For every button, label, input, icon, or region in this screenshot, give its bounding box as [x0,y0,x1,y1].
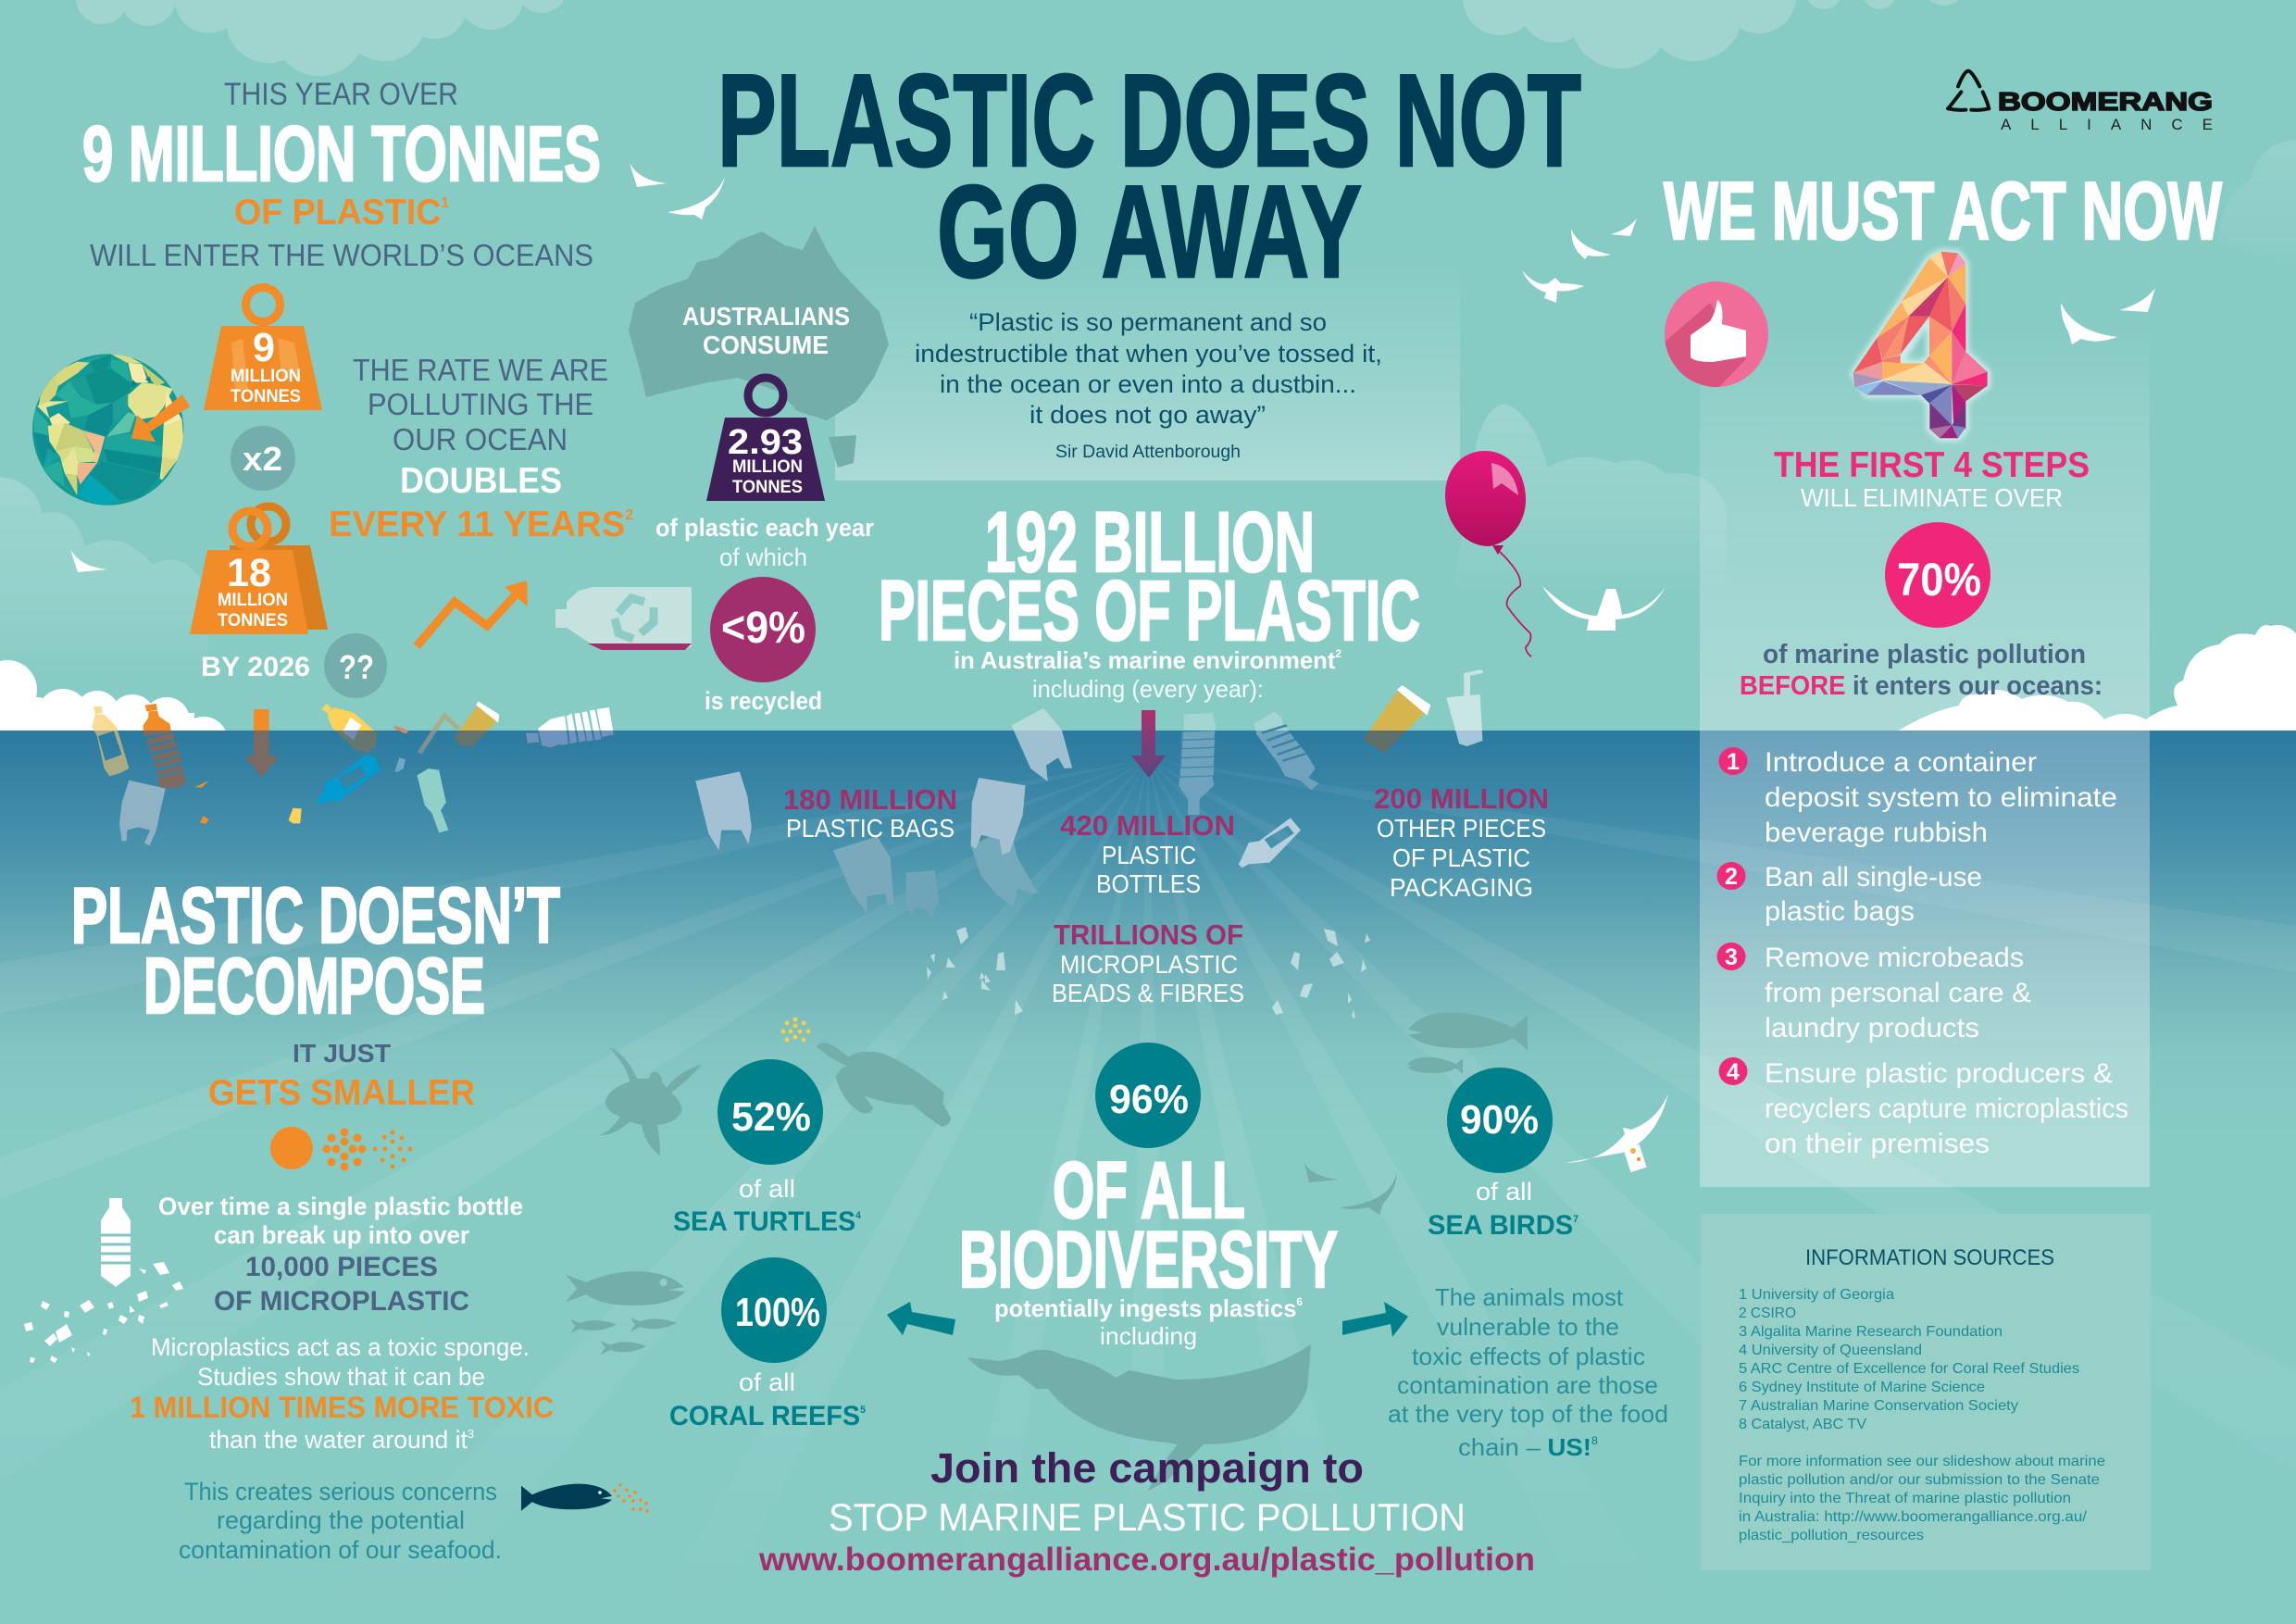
icon: plastic bag [119,781,166,845]
icon: 9 million tonnes weight: 9 [253,325,275,370]
text: it just gets smaller: IT JUST [293,1039,391,1068]
text: 180 million plastic bags [783,783,957,843]
icon: upright ribbed bottle [1179,713,1217,815]
icon: yellow microplastic dots [781,1017,811,1043]
step 4: recyclers capture microplastics [1765,1093,2128,1124]
icon: cigarette [393,725,408,734]
stat: 52 percent of sea turtles: SEA TURTLES [673,1206,865,1237]
text block: Attenborough quote: in the ocean or even into a dustbin... [940,370,1356,398]
stat: 90 percent of sea birds: SEA BIRDS [1428,1210,1578,1241]
text: 180 million plastic bags: 180 MILLION [783,783,957,816]
heading: 192 billion pieces of plastic: 192 BILLION [985,495,1315,590]
heading: information sources: INFORMATION SOURCES [1805,1245,2054,1270]
stat: 90 percent of sea birds: 7 [1573,1214,1578,1225]
silhouette: turtles and fish left [566,1043,951,1355]
stat: 52 percent of sea turtles: 4 [855,1210,862,1221]
icon: thumbs up [1662,281,1768,394]
icon: white bird with plastic [1566,1093,1668,1172]
list: source references: 5 ARC Centre of Excellence for Coral Reef Studies [1739,1361,2079,1377]
panel: four steps lower [1700,731,2150,1187]
heading: 192 billion pieces of plastic: PIECES OF PLASTIC [879,564,1420,658]
icon: pink balloon [1445,451,1531,656]
text block: rate of pollution: 2 [625,507,633,523]
sun rays under water [0,761,2296,979]
text block: top of food chain: The animals most [1435,1283,1624,1311]
stat: 52 percent of sea turtles: of all [739,1175,795,1203]
text: it just gets smaller: GETS SMALLER [208,1073,475,1113]
text: of plastic each year: of which [719,543,807,571]
icon: times two badge: x2 [243,440,282,478]
icon: bag B [971,778,1026,855]
text: 420 million plastic bottles: 420 MILLION [1060,809,1235,842]
stat: 52 percent of sea turtles: 52% [731,1094,811,1140]
stat: 100 percent of coral reefs: CORAL REEFS [669,1401,867,1431]
icon: 18 million tonnes weight: MILLION [218,591,288,610]
stat: less than nine percent recycled: <9% [721,604,805,653]
text: is recycled: is recycled [705,687,822,715]
call to action: Join the campaign to [930,1444,1364,1492]
stat: 96 percent of all biodiversity: BIODIVERSITY [959,1216,1338,1305]
icon: question badge: ?? [339,648,374,686]
text block: seafood concerns: contamination of our seafood. [179,1536,502,1564]
text: 420 million plastic bottles [1060,809,1235,898]
text: 420 million plastic bottles: PLASTIC [1102,841,1196,869]
text block: toxic sponge: 3 [468,1427,474,1441]
icon: times two badge [231,426,295,491]
icon: straw [419,716,458,753]
text: 200 million other packaging: OF PLASTIC [1392,843,1530,872]
text block: rate of pollution: POLLUTING THE [368,387,593,421]
text: in Australia's marine environment [954,646,1341,703]
text block: toxic sponge: Studies show that it can be [197,1363,485,1391]
step 2: plastic bags [1765,896,1915,927]
step 3: laundry products [1765,1013,1979,1043]
icon: orange arrow into globe [131,394,190,442]
list: source references [1739,1287,2079,1432]
stat: 100 percent of coral reefs: 100% [735,1290,820,1335]
icon: question badge [324,633,387,698]
text block: nine million tonnes heading [82,77,601,272]
text block: Australians consume [682,302,850,359]
icon: shrinking particles [270,1127,413,1170]
text block: rate of pollution: EVERY 11 YEARS [329,505,631,544]
step 1: beverage rubbish [1765,818,1988,848]
text block: first four steps: THE FIRST 4 STEPS [1774,445,2090,485]
text block: nine million tonnes heading: 9 MILLION TONNES [82,110,601,197]
stat: 70 percent: 70% [1897,554,1981,606]
microplastic fragments [927,927,1370,1018]
icon: 2.93 million tonnes weight [706,378,825,501]
icon: bag D [833,836,894,914]
icon: pale yellow bottle [92,706,129,776]
litter fragments [194,757,406,824]
icon: 9 million tonnes weight [204,287,322,410]
icon: rising trend arrow [417,581,528,646]
icon: 18 million tonnes weight: 18 [227,551,271,595]
stat: 96 percent of all biodiversity: 96% [1109,1077,1189,1122]
text: trillions of microplastic: MICROPLASTIC [1060,950,1238,979]
icon: orange bottle [144,704,186,789]
icon: recycling symbol [615,598,654,639]
text: trillions of microplastic: TRILLIONS OF [1054,918,1243,951]
text block: nine million tonnes heading: OF PLASTIC [234,193,449,232]
icon: yellow bottle [321,704,377,753]
icon: small bottle [1239,818,1301,868]
background sky [0,0,2296,731]
text block: top of food chain [1388,1283,1668,1461]
icon: mint bottle [417,768,449,832]
step 1: Introduce a container [1765,747,2037,778]
text: trillions of microplastic: BEADS & FIBRES [1052,979,1244,1007]
text block: Australians consume: AUSTRALIANS [682,302,850,331]
step 2: Ban all single-use [1765,862,1982,893]
debris: left floating bottles and litter [92,701,614,845]
icon: 2.93 million tonnes weight: MILLION [732,457,803,477]
step 3: from personal care & [1765,978,2031,1008]
icon: tilted ribbed bottle [1254,711,1319,790]
panel: quote background [835,264,1460,481]
title [718,47,1581,306]
text block: top of food chain: at the very top of the food [1388,1400,1668,1428]
stat: 100 percent of coral reefs: of all [739,1368,795,1396]
text block: rate of pollution: DOUBLES [400,461,562,501]
heading: 192 billion pieces of plastic [879,495,1420,658]
icon: drink cup with straw [1446,671,1482,746]
heading: plastic doesn't decompose [71,872,560,1031]
icon: low-poly number four [1853,252,1988,438]
text block: bottle breaks up: Over time a single plastic bottle [158,1193,523,1220]
text block: top of food chain: 8 [1591,1434,1598,1447]
text block: nine million tonnes heading: 1 [441,195,449,211]
birds: white flock [70,163,2155,631]
stat: 90 percent of sea birds [1428,1068,1578,1241]
arrow: teal right [1342,1302,1408,1337]
heading: plastic doesn't decompose: PLASTIC DOESN’T [71,872,560,960]
list: source references: 1 University of Georgia [1739,1287,1894,1303]
text block: before it enters our oceans [1740,640,2103,701]
list: source references: 8 Catalyst, ABC TV [1739,1417,1866,1432]
text block: more information: For more information see our slideshow about marine [1739,1454,2105,1469]
stat: 100 percent of coral reefs: 5 [860,1405,866,1416]
step 4: 4 [1727,1059,1740,1085]
text block: bottle breaks up [158,1193,523,1317]
silhouette: left turtle [599,1048,702,1156]
icon: low-poly globe [31,352,190,506]
silhouette: big fish [566,1271,685,1305]
text block: Attenborough quote: Sir David Attenborough [1055,443,1241,462]
text block: seafood concerns [179,1478,502,1564]
stat: 100 percent of coral reefs [669,1257,866,1431]
list: source references: 4 University of Queensland [1739,1343,1922,1358]
text: in Australia's marine environment: in Australia’s marine environment [954,646,1340,674]
arrow: teal left [887,1302,955,1335]
icon: recycling bottle [555,587,692,650]
text block: before it enters our oceans: BEFORE it enters our oceans: [1740,671,2103,701]
stat: 52 percent of sea turtles [673,1059,862,1237]
icon: 18 million tonnes weight [190,506,328,634]
debris: centre bags and bottles [695,671,1482,918]
icon: takeaway cup [1363,685,1430,753]
text block: more information: plastic pollution and/or our submission to the Senate [1739,1472,2100,1488]
silhouette: fish group right [1407,1012,1528,1074]
step 4: on their premises [1765,1129,1990,1159]
stat: less than nine percent recycled [710,577,816,682]
text: in Australia's marine environment: including (every year): [1032,675,1264,703]
text block: more information: Inquiry into the Threat of marine plastic pollution [1739,1491,2071,1506]
map: Australia [629,226,889,468]
icon: 2.93 million tonnes weight: 2.93 [728,423,803,462]
stat: 96 percent of all biodiversity: OF ALL [1053,1146,1245,1235]
clouds: right soft [1454,139,2296,593]
silhouette: right turtle [817,1043,951,1127]
text block: top of food chain: chain – US! [1458,1433,1589,1461]
step 1: 1 [1727,749,1740,775]
text block: before it enters our oceans: of marine plastic pollution [1763,640,2086,669]
text block: more information: plastic_pollution_resources [1739,1528,1924,1543]
icon: white ribbed bottle [526,707,614,747]
stat: 70 percent [1885,522,1990,628]
step 4: Ensure plastic producers & [1765,1058,2113,1089]
text block: first four steps: WILL ELIMINATE OVER [1801,483,2063,512]
text block: seafood concerns: regarding the potential [217,1506,465,1534]
text block: Attenborough quote: indestructible that when you’ve tossed it, [915,340,1382,368]
panel: information sources background [1701,1214,2151,1570]
text block: Attenborough quote [915,308,1382,462]
text block: top of food chain: toxic effects of plastic [1412,1343,1645,1370]
text: by 2026: BY 2026 [201,652,310,682]
text block: toxic sponge: 1 MILLION TIMES MORE TOXIC [130,1391,554,1424]
logo: Boomerang Alliance [1948,71,2213,133]
stat: 90 percent of sea birds: 90% [1460,1097,1539,1143]
text: in Australia's marine environment: 2 [1335,647,1341,660]
arrow: orange down arrow [244,709,279,777]
text block: nine million tonnes heading: THIS YEAR OVER [224,77,458,112]
text block: bottle breaks up: 10,000 PIECES [245,1252,438,1282]
clouds: left soft [0,477,208,676]
arrow: purple down arrow [1131,710,1166,778]
step 1: deposit system to eliminate [1765,782,2117,813]
text block: Attenborough quote: it does not go away” [1029,401,1266,429]
text: of plastic each year: of plastic each year [655,514,874,542]
call to action [758,1444,1535,1578]
heading: plastic doesn't decompose: DECOMPOSE [144,943,485,1031]
text: 420 million plastic bottles: BOTTLES [1096,869,1201,898]
text: 200 million other packaging: 200 MILLION [1374,782,1549,815]
icon: takeaway cup [455,701,499,747]
stat: 96 percent of all biodiversity: 6 [1296,1295,1303,1308]
call to action: STOP MARINE PLASTIC POLLUTION [829,1495,1466,1539]
logo: Boomerang Alliance: BOOMERANG [1998,87,2213,116]
list: source references: 3 Algalita Marine Research Foundation [1739,1324,2003,1340]
text block: toxic sponge: than the water around it [209,1426,472,1454]
text block: rate of pollution [329,353,633,544]
icon: bag C [1011,708,1072,781]
text: 200 million other packaging [1374,782,1549,902]
silhouette: birds [1304,1159,1397,1215]
clouds: top right [1463,0,1966,69]
text block: bottle breaks up: can break up into over [214,1221,469,1249]
text block: bottle breaks up: OF MICROPLASTIC [214,1286,469,1317]
text block: Australians consume: CONSUME [703,331,829,359]
text: 200 million other packaging: OTHER PIECES [1377,814,1546,843]
icon: dark fish eating plastic [521,1483,649,1513]
list: source references: 2 CSIRO [1739,1305,1796,1321]
text block: first four steps [1774,445,2090,512]
logo: Boomerang Alliance: ALLIANCE [2001,116,2213,133]
icon: breaking white bottle [24,1198,183,1363]
icon: boomerang triangle [1948,71,1989,110]
step 2: 2 [1725,864,1738,890]
clouds: top left [76,0,568,76]
icon: bag E [906,870,939,918]
icon: 18 million tonnes weight: TONNES [218,611,288,631]
stat: 96 percent of all biodiversity: including [1100,1322,1197,1350]
text block: toxic sponge: Microplastics act as a toxic sponge. [151,1333,530,1361]
text: trillions of microplastic [1052,918,1244,1007]
text: of plastic each year [655,514,874,571]
text: 180 million plastic bags: PLASTIC BAGS [786,814,955,843]
step 2 [1716,862,1982,927]
step 4 [1718,1057,2128,1159]
text block: rate of pollution: THE RATE WE ARE [353,353,608,387]
list: source references: 7 Australian Marine Conservation Society [1739,1398,2018,1414]
icon: 9 million tonnes weight: TONNES [231,387,301,406]
text block: nine million tonnes heading: WILL ENTER THE WORLD’S OCEANS [90,238,593,272]
text: it just gets smaller [208,1039,475,1113]
step 3: 3 [1725,944,1738,970]
text block: Attenborough quote: “Plastic is so permanent and so [969,308,1327,336]
clouds: white left [0,660,228,765]
call to action: www.boomerangalliance.org.au/plastic_pollution [758,1542,1535,1578]
stat: 90 percent of sea birds: of all [1476,1178,1532,1206]
step 1 [1718,747,2117,848]
text block: top of food chain: contamination are those [1397,1371,1658,1399]
text block: more information: in Australia: http://www.boomerangalliance.org.au/ [1739,1509,2088,1525]
title: GO AWAY [937,158,1362,306]
ocean [0,731,2296,1624]
step 3: Remove microbeads [1765,943,2024,973]
list: source references: 6 Sydney Institute of Marine Science [1739,1380,1985,1395]
clouds: white right [1897,625,2296,731]
icon: 9 million tonnes weight: MILLION [231,367,301,386]
icon: 2.93 million tonnes weight: TONNES [732,478,803,497]
text block: rate of pollution: OUR OCEAN [393,422,568,456]
stat: 96 percent of all biodiversity [959,1043,1338,1350]
text: 200 million other packaging: PACKAGING [1390,873,1533,902]
icon: bag A [695,771,752,850]
list: four steps [1716,747,2128,1159]
text block: seafood concerns: This creates serious concerns [184,1478,497,1505]
silhouette: whale [967,1344,1311,1491]
stat: 96 percent of all biodiversity: potentially ingests plastics [994,1294,1302,1322]
text block: top of food chain: vulnerable to the [1437,1313,1619,1341]
panel: we must act now upper [1700,324,2150,731]
icon: bag F [971,827,1039,907]
title: PLASTIC DOES NOT [718,47,1581,194]
icon: blue bottle [317,755,381,805]
silhouette: small fish [570,1318,677,1355]
text block: more information [1739,1454,2105,1543]
step 3 [1716,943,2031,1043]
text block: toxic sponge [130,1333,554,1454]
